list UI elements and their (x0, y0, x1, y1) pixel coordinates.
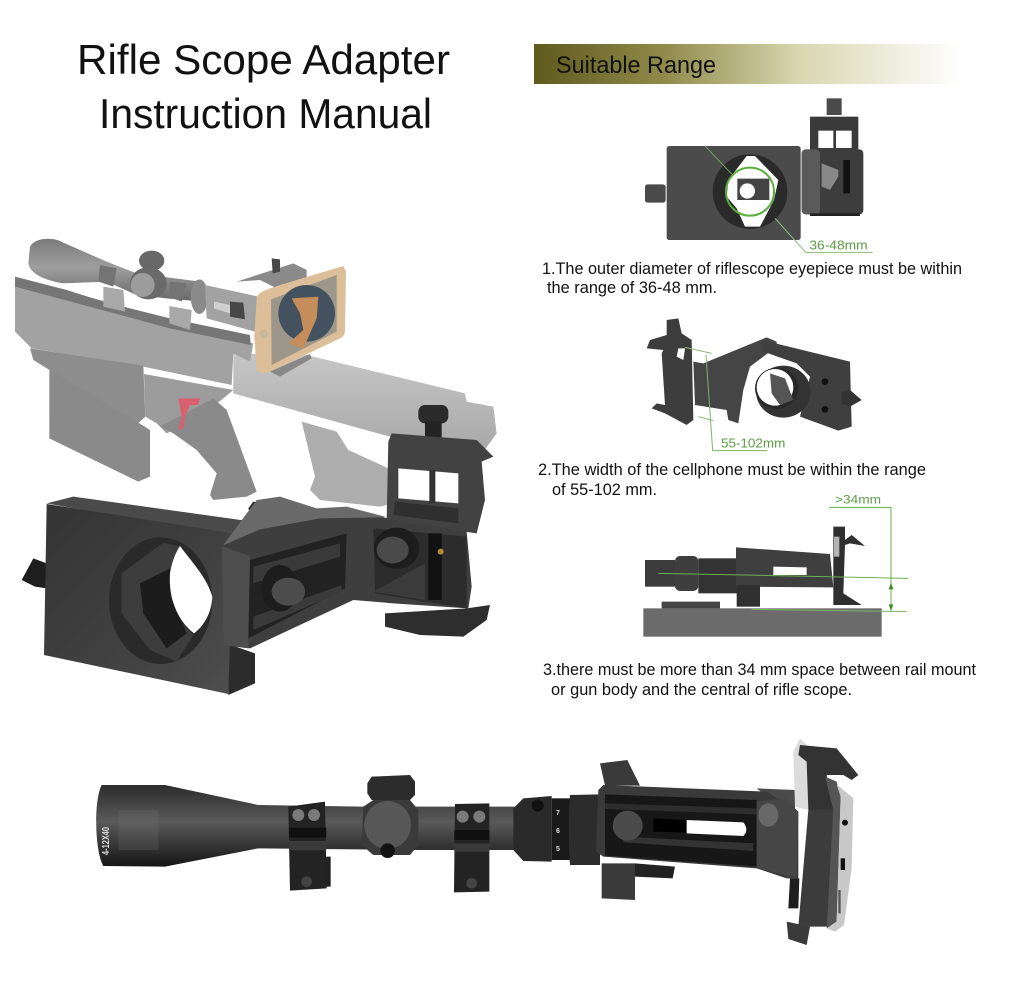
callout >34mm: >34mm (835, 493, 881, 507)
back arm (248, 502, 317, 533)
trigger housing (144, 374, 233, 433)
mount (191, 258, 307, 332)
grip (160, 398, 257, 500)
scope and adapter (645, 527, 865, 607)
photo: rifle scope (96, 775, 515, 892)
diagram 3: space above rail (643, 493, 908, 637)
adapter arm (596, 785, 798, 878)
gun body (643, 608, 882, 637)
adapter arm (222, 517, 472, 648)
rail (15, 277, 251, 345)
photo: gun body (15, 277, 497, 507)
arm right panel (373, 528, 467, 608)
stock strut (302, 422, 423, 507)
scope model label: 4-12X40 (101, 827, 112, 855)
turret (139, 251, 164, 271)
adapter clamp (387, 405, 493, 533)
ring rear (168, 282, 192, 330)
plate top edge (47, 497, 260, 537)
callout 55-102mm: 55-102mm (721, 437, 785, 451)
clamp (647, 318, 693, 425)
diagram 1: eyepiece diameter (645, 98, 873, 252)
callout 36-48mm (705, 146, 873, 252)
scope tube (28, 239, 202, 302)
adapter fins (600, 760, 675, 900)
clamp behind phone (757, 788, 795, 815)
adapter plate (44, 504, 233, 694)
adapter foot (385, 605, 490, 637)
eyepiece scale numbers: 6 (556, 828, 560, 835)
instruction text 2: 2.The width of the cellphone must be within the range (538, 461, 926, 479)
plate and barrel (755, 340, 862, 431)
scope body (96, 785, 515, 867)
eyepiece scale numbers: 7 (556, 810, 560, 817)
rifle receiver (15, 277, 253, 385)
eyepiece hole (713, 154, 787, 229)
strut window (337, 431, 388, 468)
callout >34mm (658, 493, 908, 612)
ring front (98, 265, 125, 312)
photo: adapter and phone on scope (513, 738, 858, 945)
title: Rifle Scope Adapter (77, 36, 450, 83)
instruction text 3: 3.there must be more than 34 mm space between rail mount (543, 661, 976, 679)
banner: suitable range (534, 44, 962, 84)
arm top highlight (223, 497, 385, 545)
adapter left knob (22, 558, 47, 588)
trigger (178, 398, 200, 430)
instruction text 2 (538, 461, 926, 499)
scope objective highlight (118, 810, 158, 850)
banner: suitable range: Suitable Range (556, 52, 716, 79)
lower receiver (30, 348, 145, 424)
scope turret (362, 775, 418, 858)
instruction text 1: the range of 36-48 mm. (547, 279, 717, 297)
eyepiece (513, 794, 600, 865)
instruction text 3 (543, 661, 976, 699)
rail (662, 602, 720, 608)
instruction text 1 (542, 260, 962, 297)
instruction text 3: or gun body and the central of rifle scope. (551, 681, 852, 699)
instruction text 2: of 55-102 mm. (552, 481, 657, 499)
mount base (270, 354, 312, 377)
eyepiece scale numbers: 5 (556, 846, 560, 853)
instruction text 1: 1.The outer diameter of riflescope eyepiece must be within (542, 260, 962, 278)
rifle stock (233, 353, 497, 452)
plate side (227, 643, 255, 695)
scope ring rear (454, 803, 489, 892)
photo: scope, mount and phone on gun (15, 239, 346, 377)
magazine (49, 369, 150, 482)
adapter plate (667, 146, 801, 240)
left knob (645, 184, 666, 203)
photo: large adapter (22, 405, 493, 695)
callout 55-102mm (685, 347, 785, 451)
callout 36-48mm: 36-48mm (809, 237, 868, 252)
diagram 2: cellphone width (647, 318, 862, 451)
eyepiece scale numbers (556, 810, 560, 853)
phone on gun (254, 266, 346, 373)
adapter clamp (802, 98, 863, 216)
phone and clamp (787, 738, 858, 945)
saddle (130, 267, 167, 299)
title: Instruction Manual (99, 90, 432, 137)
arm (693, 337, 777, 423)
scope ring front (288, 802, 331, 891)
title (77, 36, 450, 137)
